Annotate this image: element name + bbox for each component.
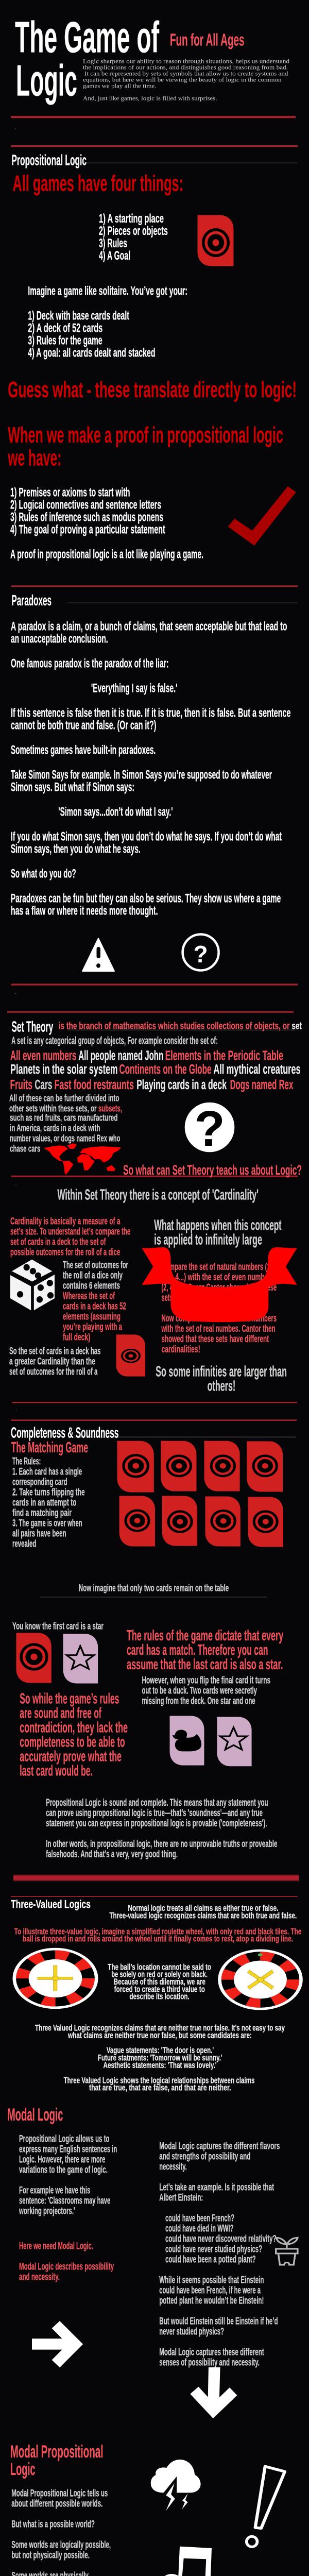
panel: cardinality bbox=[9, 1216, 297, 1395]
panel: modal propositional logic bbox=[10, 2442, 303, 2576]
text: subsets: chase cars bbox=[10, 1143, 40, 1154]
icon: potted plant bbox=[276, 2238, 298, 2265]
text: completeness conclusion: last card would be. bbox=[20, 1763, 93, 1780]
text: rules: 3. The game is over when bbox=[12, 1518, 82, 1529]
text: paradox explanation: One famous paradox is the paradox of the liar: bbox=[11, 656, 169, 670]
text: subsets: number values, or dogs named Rex who bbox=[10, 1133, 120, 1144]
examples of sets: Fruits bbox=[10, 1078, 32, 1092]
title: The Game of bbox=[15, 13, 159, 62]
text: rules: revealed bbox=[12, 1539, 36, 1550]
text: paradox explanation: has a flaw or where it needs more thought. bbox=[11, 904, 158, 918]
panel: three-valued logics bbox=[11, 1897, 303, 2093]
icon: playing card back bbox=[198, 215, 234, 266]
text: propositional logic is sound and complete bbox=[46, 1798, 277, 1860]
examples of sets: Continents on the Globe bbox=[119, 1062, 212, 1077]
panel: modal logic bbox=[7, 2105, 298, 2418]
intro paragraph: Logic sharpens our ability to reason through situations, helps us understand bbox=[83, 57, 289, 64]
list: proof components: 1) Premises or axioms to start with bbox=[10, 485, 130, 499]
heading: paradoxes: Paradoxes bbox=[11, 592, 52, 609]
text: dice versus deck: you’re playing with a bbox=[63, 1322, 122, 1333]
intro paragraph: It can be represented by sets of symbols that allow us to create systems and bbox=[84, 70, 288, 77]
callout: some infinities bbox=[156, 1364, 287, 1395]
text: set theory definition bbox=[11, 1021, 302, 1047]
panel: header bbox=[15, 13, 289, 106]
icon: check mark bbox=[228, 486, 296, 546]
text: roulette illustration bbox=[14, 1926, 302, 1943]
text: modal logic left column: For example we have this bbox=[19, 2185, 90, 2196]
intro paragraph: equations, but here we will be viewing the beauty of logic in the common bbox=[83, 76, 281, 83]
text: neither true nor false: Vague statements: 'The door is open.' bbox=[107, 2045, 214, 2055]
text: subsets: in America, cards in a deck with bbox=[10, 1123, 100, 1133]
text: subsets bbox=[9, 1092, 122, 1154]
examples of sets: Cars bbox=[35, 1078, 52, 1092]
text: set theory definition: set bbox=[291, 1021, 302, 1031]
text: modal logic right column bbox=[159, 2141, 280, 2368]
text: dice versus deck bbox=[9, 1260, 128, 1377]
text: modal logic right column: necessity. bbox=[159, 2162, 187, 2173]
text: completeness conclusion: So while the game’s rules bbox=[20, 1691, 119, 1707]
text: neither true nor false: Future statments: 'Tomorrow will be sunny.' bbox=[98, 2053, 222, 2062]
list: proof components: 3) Rules of inference such as modus ponens bbox=[10, 510, 163, 524]
text: solitaire example: 1) Deck with base cards dealt bbox=[28, 309, 129, 323]
text: modal logic right column: Albert Einstein: bbox=[159, 2193, 203, 2204]
text: rules: corresponding card bbox=[12, 1477, 67, 1488]
text: possible worlds: But what is a possible world? bbox=[11, 2519, 95, 2530]
text: solitaire example: 4) A goal: all cards dealt and stacked bbox=[28, 346, 155, 360]
text: ball location bbox=[108, 1962, 211, 2002]
examples of sets: Playing cards in a deck bbox=[136, 1078, 227, 1092]
subtitle: Fun for All Ages bbox=[170, 31, 244, 50]
text: possible worlds: about different possible worlds. bbox=[11, 2499, 102, 2510]
panel: paradoxes bbox=[11, 592, 297, 971]
text: modal logic left column: express many English sentences in bbox=[19, 2144, 117, 2155]
list: four things: 2) Pieces or objects bbox=[99, 224, 168, 238]
heading: three-valued logics: Three-Valued Logics bbox=[11, 1897, 91, 1910]
text: dice versus deck: So the set of cards in a deck has bbox=[9, 1346, 101, 1357]
cards: red card and star card bbox=[16, 1633, 98, 1684]
text: modal logic right column: and strengths of possibility and bbox=[159, 2151, 250, 2162]
text: rules: all pairs have been bbox=[12, 1529, 66, 1539]
list: four things: 1) A starting place bbox=[99, 212, 164, 226]
text: paradox explanation: Simon says. But what if Simon says: bbox=[11, 780, 134, 794]
icon: roulette wheel two with ball bbox=[218, 1950, 303, 2010]
text: first card is a star: You know the first card is a star bbox=[12, 1621, 104, 1632]
text: solitaire example: 2) A deck of 52 cards bbox=[28, 321, 102, 335]
heading: the matching game: The Matching Game bbox=[11, 1439, 88, 1456]
arrow: pointing down bbox=[190, 2367, 237, 2418]
intro paragraph bbox=[83, 57, 289, 101]
text: cantor comparison bbox=[161, 1262, 277, 1355]
text: ball location: The ball’s location cannot be said to bbox=[108, 1962, 211, 1972]
text: rules: The Rules: bbox=[12, 1456, 41, 1467]
panel: propositional logic bbox=[8, 152, 297, 561]
text: possible worlds: but not physically possible. bbox=[11, 2550, 90, 2561]
heading: when we make a proof bbox=[8, 422, 283, 470]
heading: set theory: Set Theory bbox=[11, 1019, 53, 1036]
icon: big question mark bbox=[185, 1100, 234, 1157]
arrow: pointing right bbox=[32, 2321, 83, 2367]
text: propositional logic is sound and complete: falsehoods. And that’s a very, very good thing. bbox=[46, 1849, 178, 1860]
icon: small card bbox=[116, 1334, 145, 1377]
examples of sets: Planets in the solar system bbox=[10, 1062, 117, 1077]
text: paradox explanation: So what do you do? bbox=[11, 867, 76, 880]
text: paradox explanation: 'Everything I say is false.' bbox=[91, 681, 177, 695]
text: modal logic left column: Propositional Logic allows us to bbox=[19, 2134, 109, 2145]
text: paradox explanation: an unacceptable conclusion. bbox=[11, 632, 108, 646]
panel: completeness and soundness bbox=[11, 1425, 296, 1860]
text: ball location: be solely on red or solely on black. bbox=[111, 1970, 208, 1979]
text: possible worlds: Some worlds are logically possible, bbox=[11, 2540, 111, 2551]
text: modal logic left column bbox=[19, 2134, 117, 2283]
icon: dice bbox=[10, 1260, 55, 1310]
list: proof components: 4) The goal of proving a particular statement bbox=[10, 522, 165, 536]
text: cantor comparison: sets have the same cardinality. bbox=[161, 1293, 246, 1303]
text: dice versus deck: contains 6 elements bbox=[63, 1281, 120, 1292]
examples of sets: All people named John bbox=[78, 1048, 163, 1063]
text: cardinality definition bbox=[10, 1216, 130, 1258]
text: paradox explanation bbox=[11, 619, 290, 918]
text: completeness conclusion: completeness to be able to bbox=[20, 1734, 125, 1751]
text: modal logic left column: and necessity. bbox=[19, 2272, 60, 2283]
text: rules: 1. Each card has a single bbox=[12, 1467, 82, 1478]
heading: modal propositional logic: Modal Propositional bbox=[10, 2442, 103, 2462]
text: solitaire example: 3) Rules for the game bbox=[28, 334, 102, 348]
list: four things: 4) A Goal bbox=[99, 249, 130, 263]
cards: matching game grid bbox=[117, 1441, 283, 1547]
text: subsets: All of these can be further divided into bbox=[9, 1092, 119, 1103]
text: modal logic right column: could have died in WWI? bbox=[165, 2224, 234, 2234]
text: paradox explanation: 'Simon says...don’t do what I say.' bbox=[58, 805, 173, 819]
text: paradox explanation: Simon says, then you do what he says. bbox=[11, 842, 140, 856]
text: dice versus deck: The set of outcomes for bbox=[63, 1260, 128, 1271]
callout: some infinities: others! bbox=[208, 1378, 235, 1395]
list: proof components bbox=[10, 485, 203, 561]
heading: modal propositional logic bbox=[10, 2442, 103, 2479]
icon: roulette wheel one bbox=[12, 1948, 98, 2009]
heading: completeness and soundness: Completeness & Soundness bbox=[11, 1425, 118, 1442]
text: rules bbox=[12, 1456, 85, 1550]
heading: modal logic: Modal Logic bbox=[7, 2105, 63, 2125]
text: paradox explanation: Sometimes games have built-in paradoxes. bbox=[11, 743, 156, 757]
intro paragraph: the implications of our actions, and distinguishes good reasoning from bad. bbox=[83, 63, 288, 71]
heading: all games have four things: All games have four things: bbox=[12, 171, 183, 196]
list: four things: 3) Rules bbox=[99, 236, 127, 250]
text: cardinality definition: set of cards in a deck to the set of bbox=[10, 1237, 106, 1248]
text: dice versus deck: full deck) bbox=[63, 1332, 90, 1343]
text: neither true nor false: that are true, that are false, and that are neither. bbox=[89, 2083, 231, 2093]
text: modal logic left column: sentence: 'Classrooms may have bbox=[19, 2196, 110, 2207]
text: the final card is a duck bbox=[142, 1675, 270, 1706]
text: completeness conclusion bbox=[20, 1691, 128, 1780]
text: cardinality definition: possible outcomes for the roll of a dice bbox=[10, 1247, 120, 1258]
examples of sets: All even numbers bbox=[10, 1048, 76, 1063]
text: solitaire example bbox=[28, 284, 187, 360]
text: modal logic left column: Here we need Modal Logic. bbox=[19, 2241, 93, 2252]
text: neither true nor false: Aesthetic statements: 'That was lovely.' bbox=[103, 2060, 217, 2070]
text: rules: find a matching pair bbox=[12, 1508, 72, 1519]
text: modal logic right column: could have been French? bbox=[165, 2213, 234, 2224]
text: cardinality definition: Cardinality is basically a measure of a bbox=[10, 1216, 121, 1227]
examples of sets: Fast food restraunts bbox=[55, 1078, 134, 1092]
text: cardinality definition: set’s size. To understand let’s compare the bbox=[10, 1227, 130, 1238]
icon: question circle: ? bbox=[194, 941, 208, 968]
text: rules dictate a match bbox=[127, 1628, 283, 1673]
text: completeness conclusion: contradiction, they lack the bbox=[20, 1720, 128, 1736]
text: dice versus deck: Whereas the set of bbox=[63, 1291, 115, 1302]
text: possible worlds: Modal Propositional Logic tells us bbox=[11, 2488, 108, 2499]
examples of sets bbox=[10, 1048, 301, 1092]
icon: big question mark: ? bbox=[194, 1100, 225, 1157]
text: completeness conclusion: accurately prove what the bbox=[20, 1749, 122, 1765]
text: cantor comparison: cardinalities! bbox=[161, 1344, 200, 1355]
text: modal logic left column: working projectors.' bbox=[19, 2206, 75, 2217]
text: subsets: other sets within these sets, or bbox=[9, 1103, 97, 1114]
heading: modal propositional logic: Logic bbox=[10, 2460, 35, 2479]
icon: storm cloud bbox=[151, 2460, 201, 2511]
text: ball location: Because of this dilemma, we are bbox=[114, 1977, 205, 1987]
text: normal versus three-valued bbox=[109, 1903, 297, 1920]
text: neither true nor false bbox=[35, 2023, 285, 2093]
icon: sketched exclamation mark bbox=[247, 2466, 285, 2547]
text: possible worlds bbox=[11, 2488, 111, 2576]
icon: warning triangle bbox=[82, 938, 114, 971]
title bbox=[15, 13, 159, 106]
list: four things bbox=[99, 212, 168, 263]
text: ball location: forced to create a third value to bbox=[114, 1984, 205, 1994]
heading: infinitely large bbox=[154, 1217, 282, 1248]
intro paragraph: And, just like games, logic is filled with surprises. bbox=[83, 94, 217, 101]
heading: propositional logic: Propositional Logic bbox=[11, 152, 87, 169]
text: rules: 2. Take turns flipping the bbox=[12, 1487, 85, 1498]
panel: set theory bbox=[9, 1019, 302, 1203]
text: modal logic left column: Modal Logic describes possibility bbox=[19, 2262, 114, 2273]
icon: question circle bbox=[183, 935, 219, 971]
icon: music notes bbox=[162, 2547, 212, 2576]
text: dice versus deck: elements (assuming bbox=[63, 1312, 121, 1323]
text: ball location: describe its location. bbox=[129, 1992, 190, 2002]
icon: world map bbox=[44, 1143, 121, 1175]
list: proof components: 2) Logical connectives and sentence letters bbox=[10, 498, 161, 512]
cards: duck and star bbox=[170, 1716, 252, 1766]
text: subsets: subsets, bbox=[98, 1103, 122, 1114]
heading: when we make a proof: we have: bbox=[8, 445, 61, 470]
text: solitaire example: Imagine a game like solitaire. You’ve got your: bbox=[28, 284, 187, 298]
text: paradox explanation: cannot be both true and false. (Or can it?) bbox=[11, 718, 157, 732]
text: modal logic right column: never studied physics? bbox=[159, 2327, 224, 2337]
text: dice versus deck: a greater Cardinality than the bbox=[9, 1356, 95, 1367]
text: modal logic left column: Logic. However, there are more bbox=[19, 2155, 105, 2165]
text: modal logic left column: variations to the game of logic. bbox=[19, 2165, 108, 2176]
intro paragraph: games we play all the time. bbox=[83, 82, 157, 89]
title: Logic bbox=[16, 57, 77, 106]
text: subsets: such as red fruits, cars manufactured bbox=[10, 1112, 117, 1123]
text: rules: cards in an attempt to bbox=[12, 1498, 76, 1509]
text: completeness conclusion: are sound and free of bbox=[20, 1705, 101, 1722]
icon: red ribbon banner bbox=[142, 1247, 297, 1322]
text: dice versus deck: the roll of a dice only bbox=[63, 1270, 123, 1281]
text: dice versus deck: cards in a deck has 52 bbox=[63, 1301, 126, 1312]
text: dice versus deck: set of outcomes for the roll of a bbox=[9, 1366, 98, 1377]
